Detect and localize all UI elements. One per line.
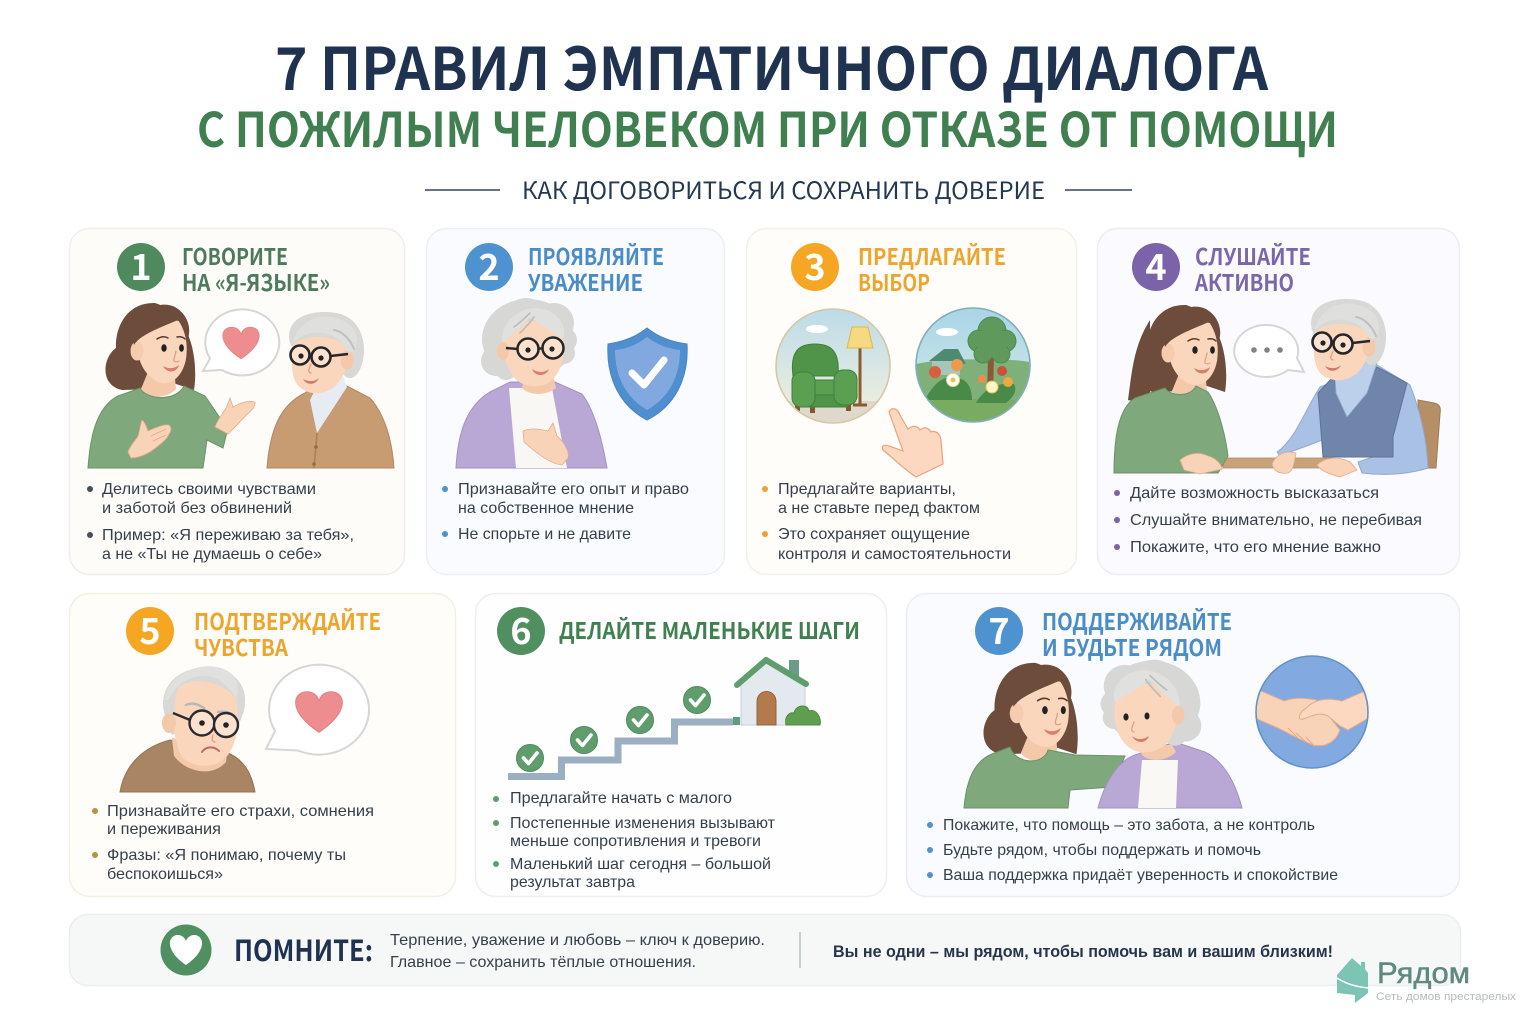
reminder text: Главное – сохранить тёплые отношения. — [390, 954, 696, 971]
panel: rule 7 — [906, 594, 1460, 896]
chart: steps with checkmarks — [508, 686, 733, 776]
label: remember: ПОМНИТЕ: — [234, 928, 373, 970]
number badge 2 — [465, 239, 513, 291]
panel: rule 6 — [476, 594, 886, 896]
bullet list 3: а не ставьте перед фактом — [778, 500, 980, 517]
heading 2: УВАЖЕНИЕ — [528, 264, 643, 298]
panel: rule 1 — [70, 228, 404, 574]
bullet list 1: и заботой без обвинений — [102, 500, 292, 517]
heading 2: ПРОЯВЛЯЙТЕ — [528, 238, 664, 272]
number badge 4 — [1132, 239, 1180, 291]
number badge 3 — [791, 239, 839, 291]
heading 5 — [194, 603, 381, 663]
icon: shield with check — [608, 328, 687, 420]
illustration: woman supporting elderly woman — [964, 660, 1242, 808]
bullet list 1 — [87, 481, 354, 563]
heading 1: ГОВОРИТЕ — [182, 238, 288, 272]
bullet list 7: Будьте рядом, чтобы поддержать и помочь — [943, 842, 1261, 859]
bullet list 5 — [92, 803, 374, 883]
bullet list 7: Ваша поддержка придаёт уверенность и спокойствие — [943, 867, 1338, 884]
logo: Рядом: Сеть домов престарелых — [1376, 991, 1517, 1003]
bullet list 6: Маленький шаг сегодня – большой — [510, 856, 771, 873]
number badge 6: 6 — [510, 603, 532, 655]
heading 5: ПОДТВЕРЖДАЙТЕ — [194, 603, 381, 637]
number badge 5 — [126, 603, 174, 655]
heading 7: ПОДДЕРЖИВАЙТЕ — [1042, 603, 1232, 637]
banner: remember — [70, 914, 1460, 986]
number badge 2: 2 — [478, 239, 500, 291]
bullet list 2 — [442, 481, 689, 543]
number badge 3: 3 — [804, 239, 826, 291]
bullet list 6: Постепенные изменения вызывают — [510, 815, 776, 832]
heading 5: ЧУВСТВА — [194, 629, 288, 663]
illustration: woman speaking — [88, 303, 255, 468]
illustration: chair and table — [1223, 400, 1440, 468]
reminder text — [390, 932, 765, 971]
bullet list 4: Слушайте внимательно, не перебивая — [1130, 512, 1422, 529]
bullet list 3: Это сохраняет ощущение — [778, 526, 970, 543]
panel: rule 3 — [746, 228, 1076, 574]
icon: handshake — [1250, 656, 1372, 768]
heading 2 — [528, 238, 664, 298]
bullet list 1: Делитесь своими чувствами — [102, 481, 316, 498]
bullet list 1: а не «Ты не думаешь о себе» — [102, 546, 322, 563]
number badge 7: 7 — [988, 603, 1010, 655]
illustration: woman listening — [1114, 305, 1228, 474]
number badge 1: 1 — [130, 239, 152, 291]
heading 7: И БУДЬТЕ РЯДОМ — [1042, 629, 1222, 663]
closing message: Вы не одни – мы рядом, чтобы помочь вам и вашим близким! — [833, 942, 1333, 961]
illustration: elderly man listening — [1272, 299, 1428, 477]
heading 1 — [182, 238, 330, 298]
reminder text: Терпение, уважение и любовь – ключ к доверию. — [390, 932, 765, 949]
bullet list 2: на собственное мнение — [458, 500, 634, 517]
bullet list 6 — [493, 790, 776, 891]
illustration: worried elderly man — [120, 666, 255, 792]
number badge 5: 5 — [139, 603, 161, 655]
title line 2: С ПОЖИЛЫМ ЧЕЛОВЕКОМ ПРИ ОТКАЗЕ ОТ ПОМОЩИ — [197, 91, 1338, 161]
illustration: elderly woman — [456, 298, 607, 468]
heading 4 — [1194, 238, 1311, 298]
bullet list 2: Признавайте его опыт и право — [458, 481, 689, 498]
number badge 4: 4 — [1145, 239, 1167, 291]
bullet list 1: Пример: «Я переживаю за тебя», — [102, 527, 354, 544]
bullet list 5: беспокоишься» — [107, 866, 223, 883]
logo: Рядом — [1337, 957, 1517, 1003]
bullet list 3: Предлагайте варианты, — [778, 481, 956, 498]
title — [197, 22, 1338, 161]
bullet list 3 — [762, 481, 1011, 563]
bullet list 7: Покажите, что помощь – это забота, а не контроль — [943, 817, 1315, 834]
bullet list 6: меньше сопротивления и тревоги — [510, 833, 761, 850]
bullet list 3: контроля и самостоятельности — [778, 546, 1011, 563]
title line 1: 7 ПРАВИЛ ЭМПАТИЧНОГО ДИАЛОГА — [275, 22, 1269, 107]
bullet list 5: Признавайте его страхи, сомнения — [107, 803, 374, 820]
heading 3 — [858, 238, 1006, 298]
logo: Рядом: Рядом — [1377, 957, 1470, 990]
bullet list 6: результат завтра — [510, 874, 635, 891]
number badge 7 — [975, 603, 1023, 655]
bullet list 2: Не спорьте и не давите — [458, 526, 631, 543]
icon: pointing hand — [882, 409, 943, 477]
bullet list 5: Фразы: «Я понимаю, почему ты — [107, 847, 346, 864]
speech bubble with heart — [266, 665, 369, 755]
heading 4: АКТИВНО — [1194, 264, 1294, 298]
heading 7 — [1042, 603, 1232, 663]
bullet list 4: Дайте возможность высказаться — [1130, 485, 1379, 502]
bullet list 5: и переживания — [107, 821, 221, 838]
number badge 1 — [117, 239, 165, 291]
heading 3: ВЫБОР — [858, 264, 930, 298]
illustration: garden option — [916, 308, 1030, 425]
subtitle: КАК ДОГОВОРИТЬСЯ И СОХРАНИТЬ ДОВЕРИЕ — [522, 171, 1045, 206]
heading 1: НА «Я-ЯЗЫКЕ» — [182, 264, 330, 298]
bullet list 4: Покажите, что его мнение важно — [1130, 539, 1381, 556]
heading 3: ПРЕДЛАГАЙТЕ — [858, 238, 1006, 272]
panel: rule 5 — [70, 594, 456, 896]
speech bubble with dots — [1234, 325, 1304, 377]
bullet list 4 — [1114, 485, 1422, 556]
panel: rule 2 — [426, 228, 724, 574]
number badge 6 — [497, 603, 545, 655]
bullet list 7 — [927, 817, 1338, 884]
bullet list 6: Предлагайте начать с малого — [510, 790, 732, 807]
panel: rule 4 — [1098, 228, 1460, 574]
icon: house — [733, 660, 820, 725]
heading 4: СЛУШАЙТЕ — [1195, 238, 1311, 272]
heading 6: ДЕЛАЙТЕ МАЛЕНЬКИЕ ШАГИ — [559, 612, 860, 646]
speech bubble with heart — [203, 309, 279, 375]
icon: heart badge — [160, 924, 212, 976]
illustration: elderly man — [267, 312, 394, 468]
illustration: armchair option — [776, 309, 890, 431]
